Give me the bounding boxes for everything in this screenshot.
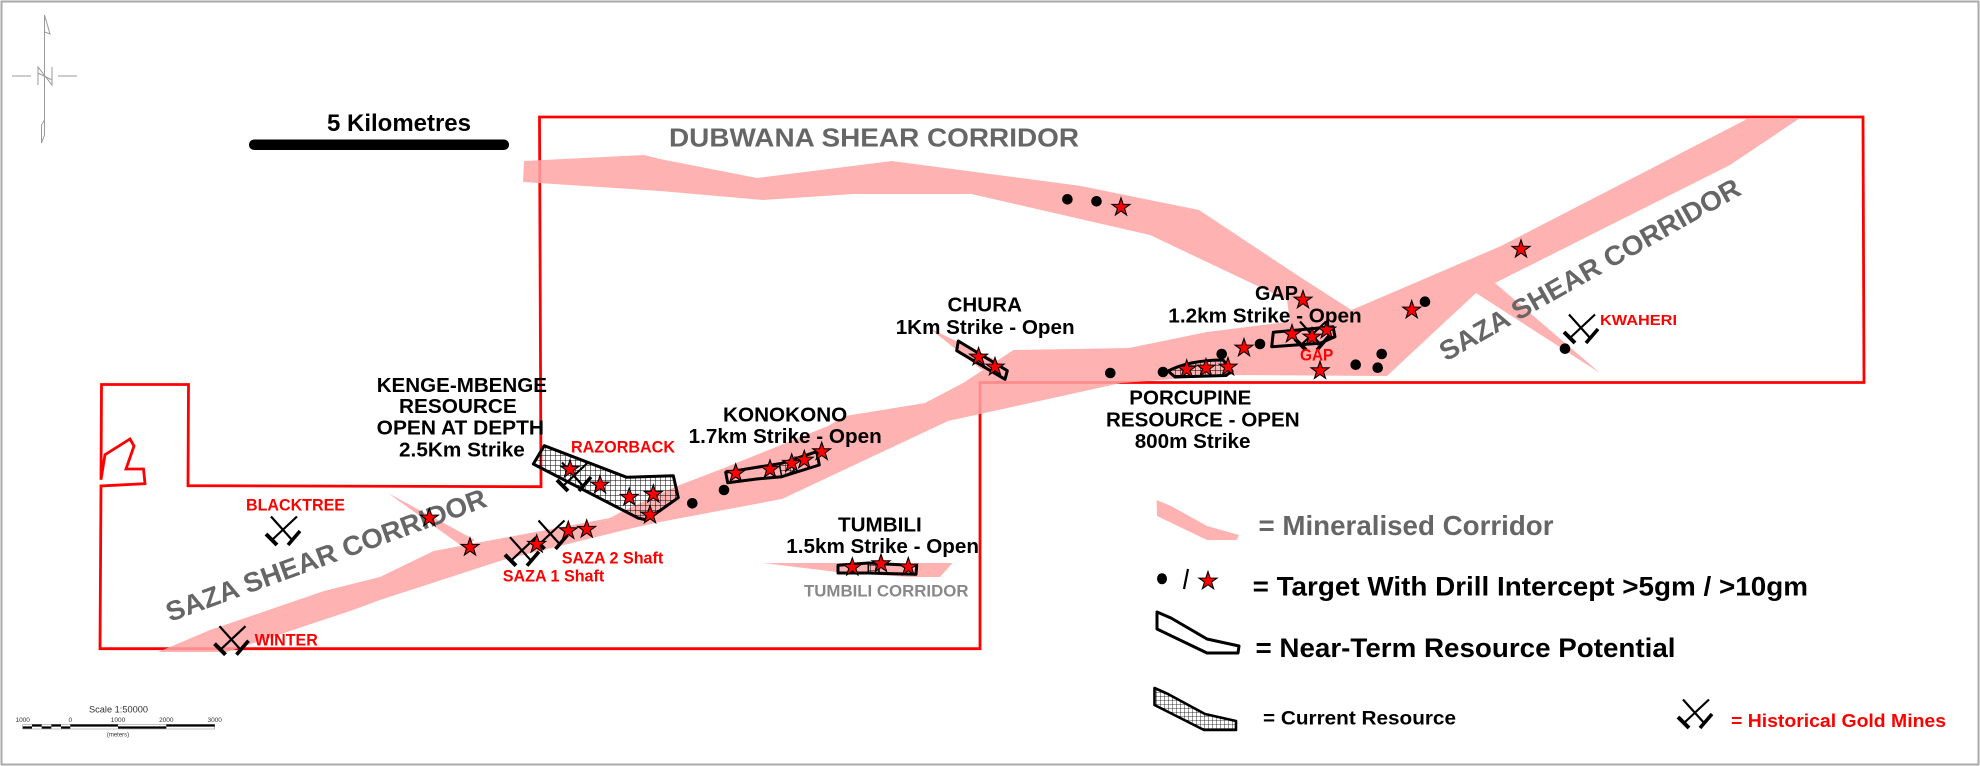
resource: Porcupine (1168, 360, 1232, 377)
label: Konokono: 1.7km Strike - Open (689, 425, 882, 448)
corridor: Saza main (158, 118, 1800, 652)
scale bar 1:50000: 2000 (159, 717, 174, 724)
label: Porcupine: RESOURCE - OPEN (1106, 408, 1300, 431)
historical gold mines (214, 314, 1598, 655)
corridor: Tumbili (763, 563, 952, 577)
label: Tumbili: 1.5km Strike - Open (786, 535, 979, 558)
mine name labels: SAZA 1 Shaft (503, 568, 605, 586)
label: Chura: CHURA (948, 294, 1022, 317)
label: Kenge-Mbenge (377, 374, 547, 461)
resource: Kenge-Mbenge (533, 446, 678, 520)
mine name labels: BLACKTREE (246, 496, 345, 514)
tenement boundary (100, 117, 1864, 649)
corridor: Chura branch (929, 328, 1000, 370)
corridor: Blacktree branch (388, 493, 475, 546)
mine name labels: WINTER (255, 631, 318, 649)
high-grade drill stars (420, 198, 1530, 575)
scale bar: 5 kilometres (249, 110, 509, 150)
label: Konokono: KONOKONO (723, 403, 847, 426)
label: Kenge-Mbenge: 2.5Km Strike (399, 438, 525, 461)
legend: drill targets: = Target With Drill Intercept >5gm / >10gm (1253, 572, 1808, 602)
mine name labels: GAP (1300, 347, 1333, 365)
label: Kenge-Mbenge: OPEN AT DEPTH (377, 417, 544, 440)
drill intercept dots (687, 194, 1570, 509)
label: Chura (896, 294, 1075, 339)
resource: Gap (1272, 327, 1335, 347)
label: Chura: 1Km Strike - Open (896, 316, 1075, 339)
mine name labels: KWAHERI (1600, 312, 1677, 329)
scale bar: 5 kilometres: 5 Kilometres (327, 110, 471, 137)
mine name labels: RAZORBACK (571, 438, 675, 456)
scale bar 1:50000: 1000 (15, 717, 30, 724)
legend: near-term resource potential (1157, 612, 1676, 663)
scale bar 1:50000: 0 (68, 717, 72, 724)
label: Dubwana: DUBWANA SHEAR CORRIDOR (669, 123, 1079, 153)
resource: Tumbili (838, 563, 917, 574)
scale bar 1:50000 (15, 704, 222, 739)
north arrow (12, 15, 77, 143)
label: Porcupine: 800m Strike (1135, 430, 1250, 453)
mine name labels (246, 312, 1677, 649)
label: Saza west: SAZA SHEAR CORRIDOR (161, 483, 491, 628)
legend: current resource: = Current Resource (1263, 708, 1456, 730)
label: Gap: GAP (1255, 282, 1298, 305)
label: Tumbili: TUMBILI (838, 513, 922, 536)
legend: current resource (1154, 688, 1456, 730)
scale bar 1:50000: Scale 1:50000 (89, 704, 148, 714)
corridor labels (161, 123, 1746, 628)
mineralised corridors (158, 118, 1800, 652)
mine name labels: SAZA 2 Shaft (562, 549, 664, 567)
legend: historical gold mines: = Historical Gold Mines (1731, 710, 1946, 731)
legend: historical gold mines (1678, 700, 1946, 731)
label: Saza east: SAZA SHEAR CORRIDOR (1434, 172, 1746, 367)
label: Kenge-Mbenge: RESOURCE (399, 395, 517, 418)
legend: near-term resource potential: = Near-Term Resource Potential (1256, 633, 1676, 663)
label: Gap (1168, 282, 1362, 327)
legend: mineralised corridor: = Mineralised Corridor (1258, 510, 1554, 541)
label: Porcupine: PORCUPINE (1129, 387, 1251, 410)
label: Konokono (689, 403, 882, 448)
label: Kenge-Mbenge: KENGE-MBENGE (377, 374, 547, 397)
legend: mineralised corridor (1157, 500, 1554, 541)
scale bar 1:50000: 3000 (207, 717, 222, 724)
prospect labels (377, 282, 1362, 558)
resource outlines (533, 327, 1335, 574)
label: Tumbili corridor: TUMBILI CORRIDOR (804, 581, 968, 600)
resource: Chura (957, 341, 1007, 379)
label: Gap: 1.2km Strike - Open (1168, 304, 1362, 327)
scale bar 1:50000: 1000 (111, 717, 126, 724)
label: Porcupine (1106, 387, 1300, 453)
label: Tumbili (786, 513, 979, 558)
scale bar 1:50000: (meters) (107, 733, 129, 739)
corridor: Dubwana (523, 155, 1352, 322)
legend (1154, 500, 1946, 731)
resource: Konokono (726, 452, 819, 483)
